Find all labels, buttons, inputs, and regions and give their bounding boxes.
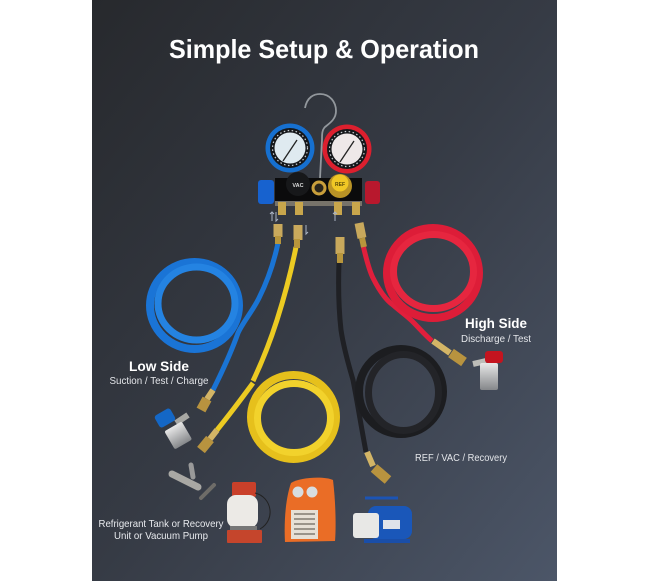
label: refrigerant tank or recovery unit: Refrigerant Tank or Recovery — [98, 518, 224, 530]
label: low side: Suction / Test / Charge — [110, 375, 209, 387]
black hose — [339, 237, 443, 480]
recovery unit — [285, 478, 336, 542]
label: ref vac recovery: REF / VAC / Recovery — [415, 452, 508, 464]
red side knob — [365, 181, 380, 204]
yellow hose — [201, 225, 336, 459]
flow arrows — [270, 212, 337, 234]
title: Simple Setup & Operation — [169, 34, 479, 64]
manifold gauge set — [258, 94, 380, 215]
black VAC knob: VAC — [292, 183, 304, 189]
brass connector — [336, 237, 344, 254]
label: high side — [461, 315, 531, 345]
icon: hanging hook — [305, 94, 336, 178]
vacuum pump — [353, 498, 412, 543]
brass end fitting — [433, 341, 450, 353]
yellow REF knob: REF — [335, 182, 345, 188]
red high side coupler — [473, 351, 503, 390]
label: high side: Discharge / Test — [461, 333, 531, 345]
brass sight glass — [313, 182, 325, 194]
blue side knob — [258, 180, 274, 204]
brass end fitting — [367, 452, 373, 466]
red hose — [359, 223, 479, 362]
label: high side: High Side — [465, 315, 527, 331]
brass connector — [274, 224, 282, 237]
brass connector — [294, 225, 302, 240]
refrigerant tank — [227, 482, 270, 543]
blue hose — [150, 224, 278, 410]
blue low side coupler — [154, 407, 192, 450]
can tap valve — [172, 465, 214, 498]
label: low side: Low Side — [129, 358, 189, 374]
brass ports — [278, 202, 360, 215]
manifold body — [275, 178, 362, 201]
label: refrigerant tank or recovery unit: Unit or Vacuum Pump — [114, 530, 208, 542]
brass connector — [359, 223, 362, 238]
background panel — [92, 0, 557, 581]
label: refrigerant tank or recovery unit — [98, 518, 224, 542]
brass end fitting — [210, 430, 217, 439]
brass end fitting — [207, 390, 213, 399]
red high pressure gauge — [322, 124, 372, 174]
label: low side — [110, 358, 209, 387]
blue low pressure gauge — [266, 124, 314, 172]
